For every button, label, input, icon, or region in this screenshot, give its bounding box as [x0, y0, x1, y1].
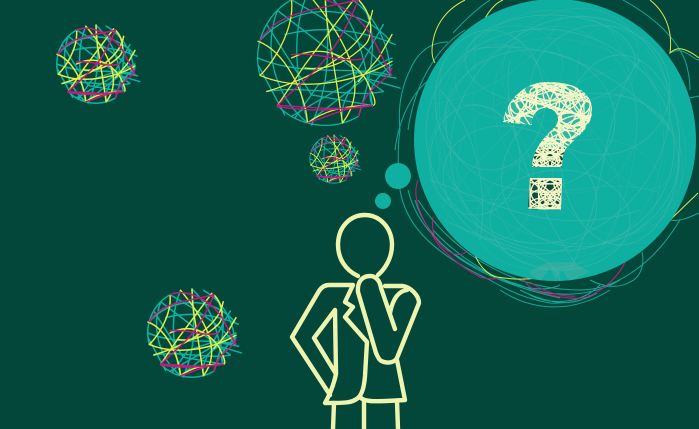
jacket left side and lapel — [292, 285, 367, 403]
scribble ball: small centre — [310, 135, 361, 183]
head — [338, 215, 392, 276]
scribble ball: top centre — [258, 0, 400, 125]
legs — [333, 400, 398, 429]
thought bubble: large circle — [414, 0, 696, 281]
jacket right side — [358, 276, 419, 401]
thought bubble: medium dot — [385, 163, 411, 189]
thought bubble: small dot — [375, 193, 391, 209]
scribble outline around thought bubble — [395, 0, 699, 307]
faint scribble texture — [424, 8, 686, 281]
thinking person figure — [292, 215, 419, 429]
question mark — [503, 82, 592, 210]
scribble ball: lower left — [148, 289, 241, 377]
scribble ball: top left — [57, 25, 140, 103]
